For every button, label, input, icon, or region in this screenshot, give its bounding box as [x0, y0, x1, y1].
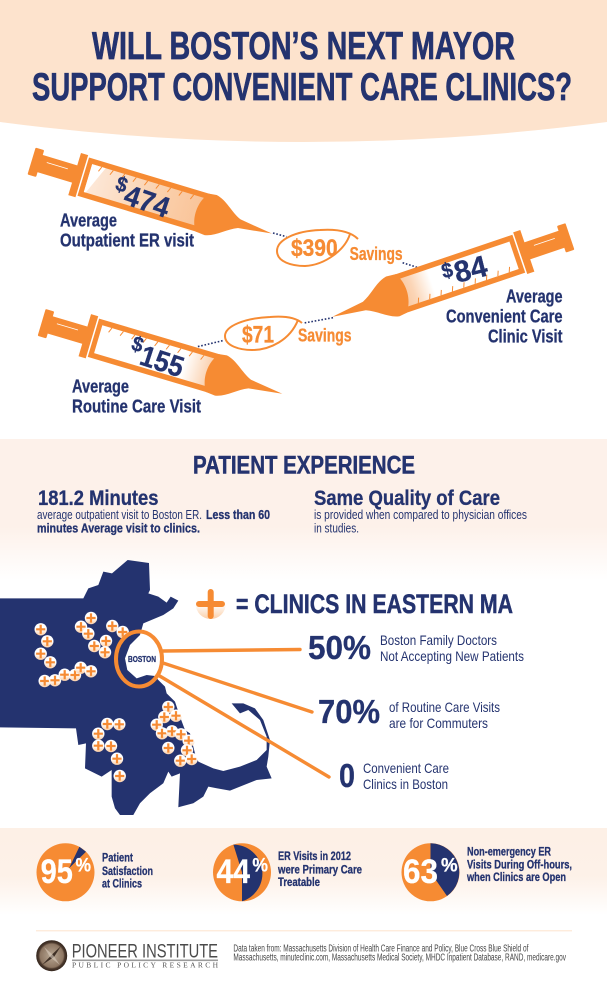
label: patient satisfaction: at Clinics	[102, 877, 142, 891]
pie: 44%	[213, 843, 271, 901]
label: non-emergency ER	[466, 844, 572, 884]
label: outpatient ER	[60, 211, 194, 251]
savings: $71	[225, 317, 352, 350]
callout lines	[158, 650, 329, 777]
price: $84: $	[439, 258, 456, 284]
stat: 50%: Not Accepting New Patients	[380, 648, 524, 664]
text block: same quality of care: Same Quality of Care	[314, 487, 500, 510]
stat: 70%	[318, 693, 500, 731]
logo: Pioneer Institute: PUBLIC POLICY RESEARCH	[72, 961, 219, 970]
label: patient satisfaction: Satisfaction	[102, 864, 153, 878]
label: outpatient ER: Outpatient ER visit	[60, 231, 194, 251]
stat: 0: Convenient Care	[363, 760, 449, 776]
icon: compass	[36, 940, 67, 971]
pie: 63%: 63	[403, 853, 438, 891]
text block: 181.2 minutes: Less than 60	[206, 508, 270, 522]
price: $474: 474	[120, 180, 174, 225]
price: $155: 155	[136, 340, 188, 384]
stat: 0: 0	[339, 757, 355, 794]
stat: 70%: are for Commuters	[389, 715, 488, 731]
savings: $71: $71	[242, 321, 274, 348]
label: convenient care	[446, 287, 562, 347]
stat: 70%: of Routine Care Visits	[389, 699, 500, 715]
title	[32, 25, 572, 109]
label: ER visits: Treatable	[278, 875, 320, 889]
label: outpatient ER: Average	[60, 211, 117, 231]
label: non-emergency ER: when Clinics are Open	[466, 870, 566, 884]
pie: 44%: %	[252, 856, 268, 877]
text block: 181.2 minutes: minutes Average visit to clinics.	[37, 522, 200, 536]
pie: 95%: %	[76, 856, 91, 877]
pie: 44%: 44	[216, 853, 250, 891]
text block: same quality of care: in studies.	[314, 522, 359, 536]
header banner	[0, 0, 607, 142]
label: patient satisfaction: Patient	[102, 851, 133, 865]
price: $474	[109, 172, 175, 225]
label: convenient care: Clinic Visit	[488, 327, 562, 347]
stat: 70%: 70%	[318, 693, 380, 730]
heading: patient experience: PATIENT EXPERIENCE	[193, 451, 415, 479]
price: $155: $	[129, 332, 147, 358]
text block: 181.2 minutes: 181.2 Minutes	[38, 487, 158, 510]
savings: $390	[277, 230, 403, 266]
panel: patient experience	[0, 439, 607, 580]
label: routine care: Average	[72, 377, 129, 397]
price: $155	[125, 332, 189, 384]
pie: 95%: 95	[41, 853, 73, 891]
logo: Pioneer Institute: PIONEER INSTITUTE	[72, 942, 218, 963]
Boston label: BOSTON	[128, 654, 156, 664]
text block: same quality of care: is provided when compared to physician offices	[314, 508, 527, 522]
stat: 50%: Boston Family Doctors	[380, 632, 497, 648]
stat: 50%: 50%	[308, 629, 371, 666]
logo: Pioneer Institute	[36, 940, 219, 971]
label: ER visits	[277, 849, 362, 889]
stat: 50%	[308, 629, 524, 666]
label: routine care	[72, 377, 201, 417]
dotted connectors	[197, 233, 417, 347]
label: patient satisfaction	[102, 851, 153, 891]
label: convenient care: Average	[506, 287, 562, 307]
label: routine care: Routine Care Visit	[72, 397, 201, 417]
syringe: routine care visit $155	[35, 301, 289, 415]
savings: $390: $390	[291, 235, 338, 262]
clinic markers	[34, 612, 198, 782]
syringe: convenient care clinic $84	[325, 216, 577, 338]
label: convenient care: Convenient Care	[446, 307, 562, 327]
price: $84: 84	[451, 250, 491, 290]
label: non-emergency ER: Non-emergency ER	[467, 844, 551, 858]
text block: 181.2 minutes: average outpatient visit to Boston ER.	[37, 508, 202, 522]
label: ER visits: were Primary Care	[277, 862, 362, 876]
legend: clinics: = CLINICS IN EASTERN MA	[236, 589, 513, 619]
label: ER visits: ER Visits in 2012	[278, 849, 351, 863]
text block: same quality of care	[314, 487, 527, 536]
label: non-emergency ER: Visits During Off-hours,	[467, 857, 572, 871]
savings: $390: Savings	[350, 244, 403, 264]
stat: 0	[339, 757, 449, 794]
pie: 63%: %	[441, 856, 458, 877]
savings: $71: Savings	[298, 326, 352, 346]
Boston ring	[116, 632, 162, 686]
text block: 181.2 minutes	[37, 487, 270, 536]
panel: satisfaction statistics	[0, 828, 607, 915]
syringe: outpatient ER visit $474	[25, 140, 278, 255]
stat: 0: Clinics in Boston	[363, 776, 448, 792]
map: eastern Massachusetts	[0, 560, 329, 815]
price: $474: $	[113, 172, 131, 198]
pie: 95%	[36, 843, 94, 901]
pie: 63%	[402, 843, 460, 901]
data sources	[233, 944, 566, 964]
